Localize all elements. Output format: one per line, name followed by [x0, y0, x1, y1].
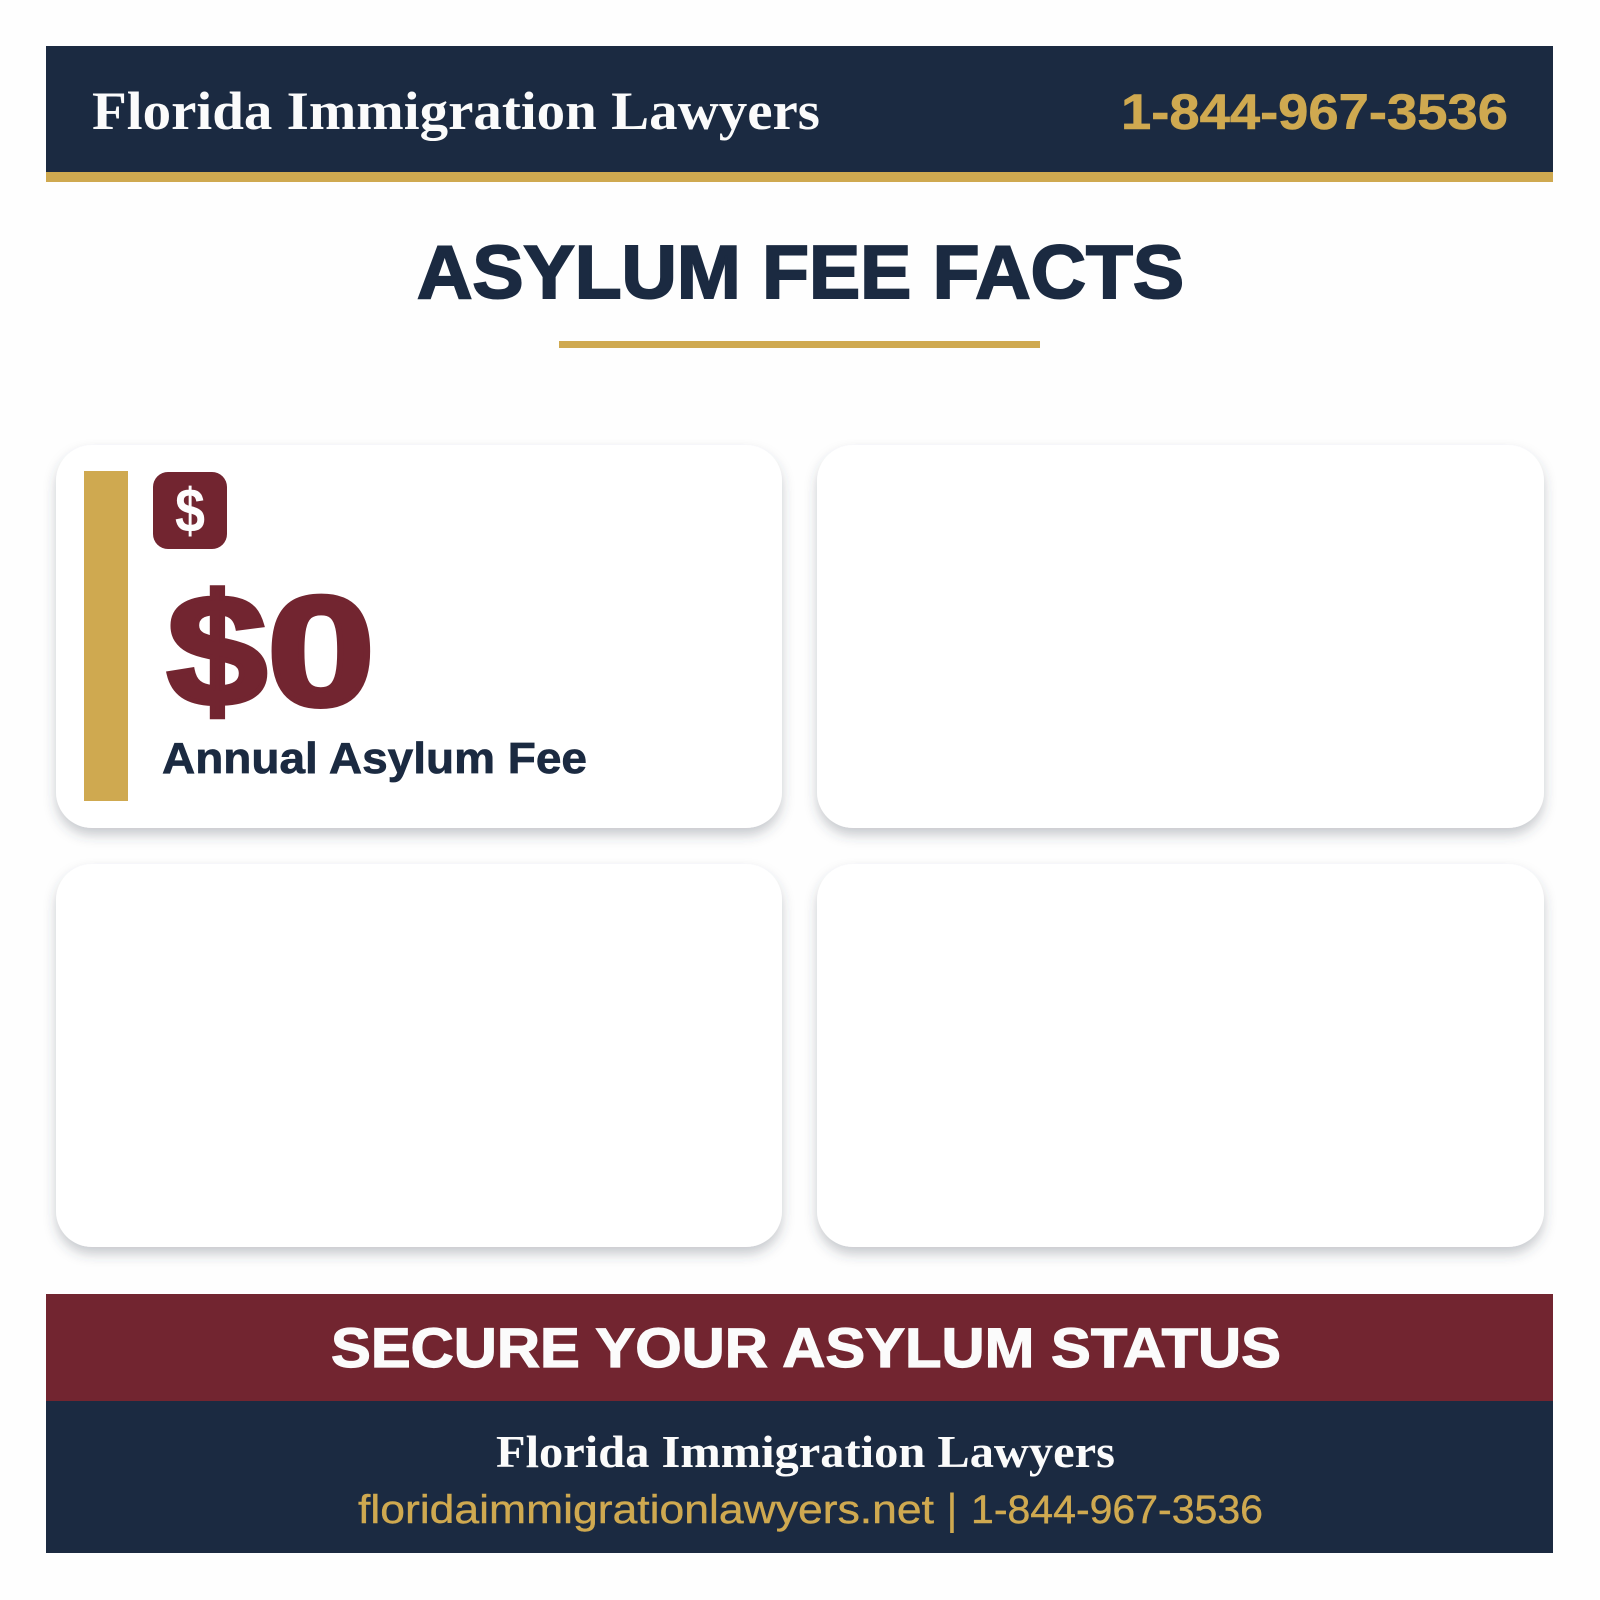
gold accent bar — [84, 471, 128, 801]
fee amount: $ — [167, 563, 267, 739]
footer firm name: Florida Immigration Lawyers — [496, 1426, 1115, 1477]
fee amount: 0 — [267, 565, 375, 739]
header firm name: Florida Immigration Lawyers — [92, 81, 820, 141]
panel: empty card bottom right — [817, 864, 1544, 1247]
title underline — [559, 341, 1040, 348]
footer contact line — [358, 1485, 1263, 1534]
icon: dollar sign badge: $ — [175, 477, 205, 546]
fee label: Annual Asylum Fee — [162, 734, 587, 783]
panel: annual asylum fee card — [56, 445, 782, 828]
icon: dollar sign badge — [153, 472, 227, 549]
header phone number: 1-844-967-3536 — [1121, 84, 1508, 140]
header band — [46, 46, 1553, 182]
fee amount — [167, 563, 375, 739]
call to action text: SECURE YOUR ASYLUM STATUS — [331, 1316, 1281, 1379]
call to action banner — [46, 1294, 1553, 1401]
footer band — [46, 1401, 1553, 1553]
footer contact line: 1-844-967-3536 — [971, 1488, 1263, 1532]
panel: empty card bottom left — [56, 864, 782, 1247]
footer contact line: floridaimmigrationlawyers.net — [358, 1488, 934, 1532]
footer contact line: | — [946, 1485, 958, 1534]
title: ASYLUM FEE FACTS — [417, 230, 1184, 314]
panel: empty card top right — [817, 445, 1544, 828]
